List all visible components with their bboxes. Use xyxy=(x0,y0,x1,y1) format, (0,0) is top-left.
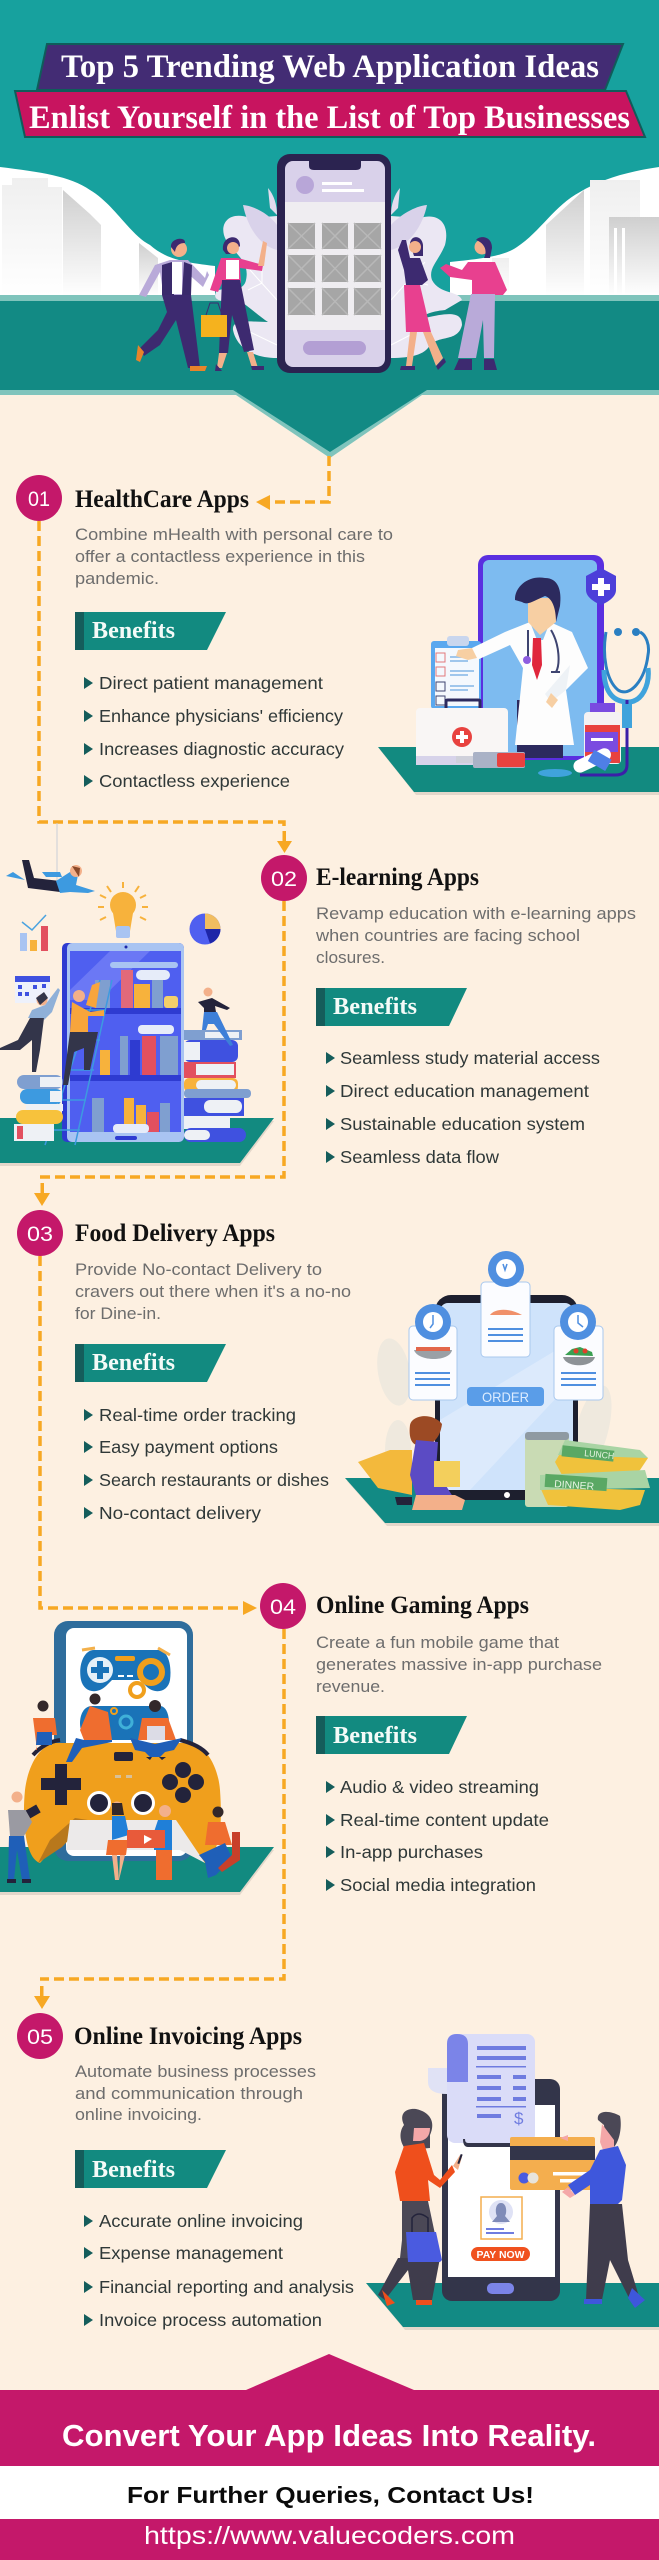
benefits tag xyxy=(316,1716,467,1754)
benefits list xyxy=(326,1777,549,1895)
connector: step 03 to step 04 xyxy=(40,1256,257,1615)
person: woman in pink top xyxy=(440,237,507,370)
connector: step 04 to step 05 xyxy=(34,1629,284,2009)
lunch boxes: DINNER xyxy=(554,1479,594,1493)
step badge 04 xyxy=(260,1583,306,1629)
description: Provide No-contact Delivery to xyxy=(75,1260,322,1279)
description: Create a fun mobile game that xyxy=(316,1633,559,1652)
woman sitting xyxy=(358,1416,465,1510)
people on controller xyxy=(33,1694,182,1762)
illustration: food order tablet xyxy=(345,1251,659,1526)
credit card xyxy=(510,2137,595,2190)
benefits tag xyxy=(75,2150,226,2188)
title banner: line 2: Enlist Yourself in the List of Top Businesses xyxy=(29,100,630,136)
step badge 05: 05 xyxy=(27,2026,53,2049)
heading: E-learning Apps xyxy=(316,864,479,891)
benefits list: Real-time order tracking xyxy=(99,1405,296,1425)
receipt: $ xyxy=(514,2109,524,2128)
benefits list: Seamless data flow xyxy=(340,1147,499,1167)
person: running man xyxy=(136,239,209,371)
ground band and pointer xyxy=(0,295,659,458)
background leaves xyxy=(372,1336,619,1480)
calendar xyxy=(15,976,50,1003)
description: when countries are facing school xyxy=(315,926,580,945)
phone xyxy=(442,2079,560,2301)
description: offer a contactless experience in this xyxy=(75,547,365,566)
benefits list: In-app purchases xyxy=(340,1842,483,1862)
benefits tag: Benefits xyxy=(92,2157,175,2183)
connector: step 01 to step 02 xyxy=(39,521,292,853)
description xyxy=(316,1633,602,1696)
benefits list: Financial reporting and analysis xyxy=(99,2277,354,2297)
order cards xyxy=(409,1282,603,1400)
order button: ORDER xyxy=(482,1389,529,1405)
first-aid kit xyxy=(416,700,508,765)
heading: Online Invoicing Apps xyxy=(74,2023,302,2050)
description: for Dine-in. xyxy=(75,1304,161,1323)
benefits list: Direct education management xyxy=(340,1081,589,1101)
benefits list xyxy=(84,1405,329,1523)
footer: call to action band: Convert Your App Ideas Into Reality. xyxy=(62,2418,596,2453)
photo tiles xyxy=(288,223,381,315)
benefits tag: Benefits xyxy=(333,1723,417,1749)
person with calendar xyxy=(0,988,60,1072)
benefits list: Contactless experience xyxy=(99,771,290,791)
connector: step 02 to step 03 xyxy=(34,901,284,1206)
step badge 04: 04 xyxy=(270,1596,296,1619)
step badge 05 xyxy=(17,2013,63,2059)
description: revenue. xyxy=(316,1677,385,1696)
pills xyxy=(571,746,613,775)
heading: Online Gaming Apps xyxy=(316,1592,529,1619)
description: Revamp education with e-learning apps xyxy=(316,904,636,923)
heading: Food Delivery Apps xyxy=(75,1220,275,1247)
benefits list: Real-time content update xyxy=(340,1810,549,1830)
panel: 01 HealthCare Apps xyxy=(16,475,659,795)
benefits tag xyxy=(75,612,226,650)
clipboard xyxy=(431,636,481,709)
description xyxy=(315,904,636,967)
benefits list: Expense management xyxy=(99,2243,283,2263)
flying person xyxy=(6,860,95,893)
illustration: invoice payment xyxy=(366,2034,659,2330)
lunch boxes: LUNCH xyxy=(584,1448,615,1461)
description: cravers out there when it's a no-no xyxy=(75,1282,351,1301)
benefits list xyxy=(84,2211,354,2330)
benefits list: Increases diagnostic accuracy xyxy=(99,739,344,759)
big controller xyxy=(24,1740,221,1863)
ladder and climbing person xyxy=(45,980,112,1145)
description: pandemic. xyxy=(75,569,159,588)
book stacks xyxy=(14,1030,251,1142)
description: online invoicing. xyxy=(75,2105,202,2124)
panel: 02 E-learning Apps xyxy=(0,823,636,1167)
description: Combine mHealth with personal care to xyxy=(75,525,393,544)
stethoscope xyxy=(538,628,649,777)
benefits tag xyxy=(75,1344,226,1382)
benefits list: Audio & video streaming xyxy=(340,1777,539,1797)
title banner: line 1: Top 5 Trending Web Application Ideas xyxy=(61,49,599,85)
illustration: game controller xyxy=(0,1621,274,1895)
doctor xyxy=(456,577,588,745)
benefits list xyxy=(326,1048,600,1167)
leaves behind phone xyxy=(215,188,462,358)
benefits tag xyxy=(316,988,467,1026)
footer: website url: https://www.valuecoders.com xyxy=(144,2522,515,2550)
lunch boxes xyxy=(525,1432,650,1510)
city skyline left xyxy=(0,167,215,296)
panel: 05 Online Invoicing Apps xyxy=(17,2013,659,2330)
benefits list xyxy=(84,673,344,791)
tablet xyxy=(435,1295,578,1500)
benefits list: Sustainable education system xyxy=(340,1114,585,1134)
step badge 03: 03 xyxy=(27,1223,53,1246)
benefits tag: Benefits xyxy=(333,994,417,1020)
illustration: library tablet xyxy=(0,823,274,1166)
pay now button: PAY NOW xyxy=(476,2249,525,2261)
tablet bookshelf xyxy=(62,943,184,1142)
illustration: doctor in phone xyxy=(378,555,659,795)
footer: website url xyxy=(0,2519,659,2560)
shield badge xyxy=(586,568,616,605)
step badge 02 xyxy=(261,855,307,901)
connector: header to step 01 xyxy=(256,456,329,510)
description: Automate business processes xyxy=(75,2062,316,2081)
benefits list: Accurate online invoicing xyxy=(99,2211,303,2231)
people standing xyxy=(7,1792,240,1883)
benefits list: Easy payment options xyxy=(99,1437,278,1457)
small controller on phone xyxy=(80,1648,170,1740)
benefits tag: Benefits xyxy=(92,618,175,644)
person: woman in pink skirt xyxy=(398,237,446,370)
heading: HealthCare Apps xyxy=(75,486,249,513)
phone xyxy=(54,1621,193,1861)
description xyxy=(75,525,393,588)
order button xyxy=(467,1387,544,1406)
footer: contact strip: For Further Queries, Contact Us! xyxy=(127,2482,534,2508)
description: generates massive in-app purchase xyxy=(316,1655,602,1674)
benefits list: Search restaurants or dishes xyxy=(99,1470,329,1490)
medicine bottle xyxy=(584,703,621,764)
bar chart xyxy=(20,915,48,951)
panel: 04 Online Gaming Apps xyxy=(0,1583,602,1895)
person on right stack xyxy=(198,988,233,1046)
header panel xyxy=(0,0,659,458)
hero illustration: phone and people xyxy=(136,154,507,373)
light bulb xyxy=(98,882,148,938)
clock badges xyxy=(415,1251,596,1340)
description xyxy=(75,2062,316,2124)
pie chart xyxy=(190,914,220,944)
profile box xyxy=(481,2197,522,2239)
description: and communication through xyxy=(75,2084,303,2103)
benefits list: No-contact delivery xyxy=(99,1503,261,1523)
step badge 01 xyxy=(16,475,62,521)
benefits tag: Benefits xyxy=(92,1350,175,1376)
panel: 03 Food Delivery Apps xyxy=(17,1210,659,1526)
step badge 02: 02 xyxy=(271,868,297,891)
benefits list: Direct patient management xyxy=(99,673,323,693)
benefits list: Invoice process automation xyxy=(99,2310,322,2330)
step badge 03 xyxy=(17,1210,63,1256)
benefits list: Enhance physicians' efficiency xyxy=(99,706,343,726)
man with card xyxy=(560,2112,645,2308)
step badge 01: 01 xyxy=(28,488,50,511)
description xyxy=(75,1260,351,1323)
syringe xyxy=(456,752,525,768)
phone body xyxy=(277,154,391,373)
benefits list: Social media integration xyxy=(340,1875,536,1895)
woman with bag xyxy=(378,2109,463,2306)
benefits list: Seamless study material access xyxy=(340,1048,600,1068)
person: woman with bag xyxy=(201,237,267,371)
footer: contact strip xyxy=(0,2466,659,2519)
description: closures. xyxy=(316,948,385,967)
footer: call to action band xyxy=(0,2354,659,2466)
receipt xyxy=(428,2034,535,2147)
city skyline right xyxy=(450,167,659,296)
